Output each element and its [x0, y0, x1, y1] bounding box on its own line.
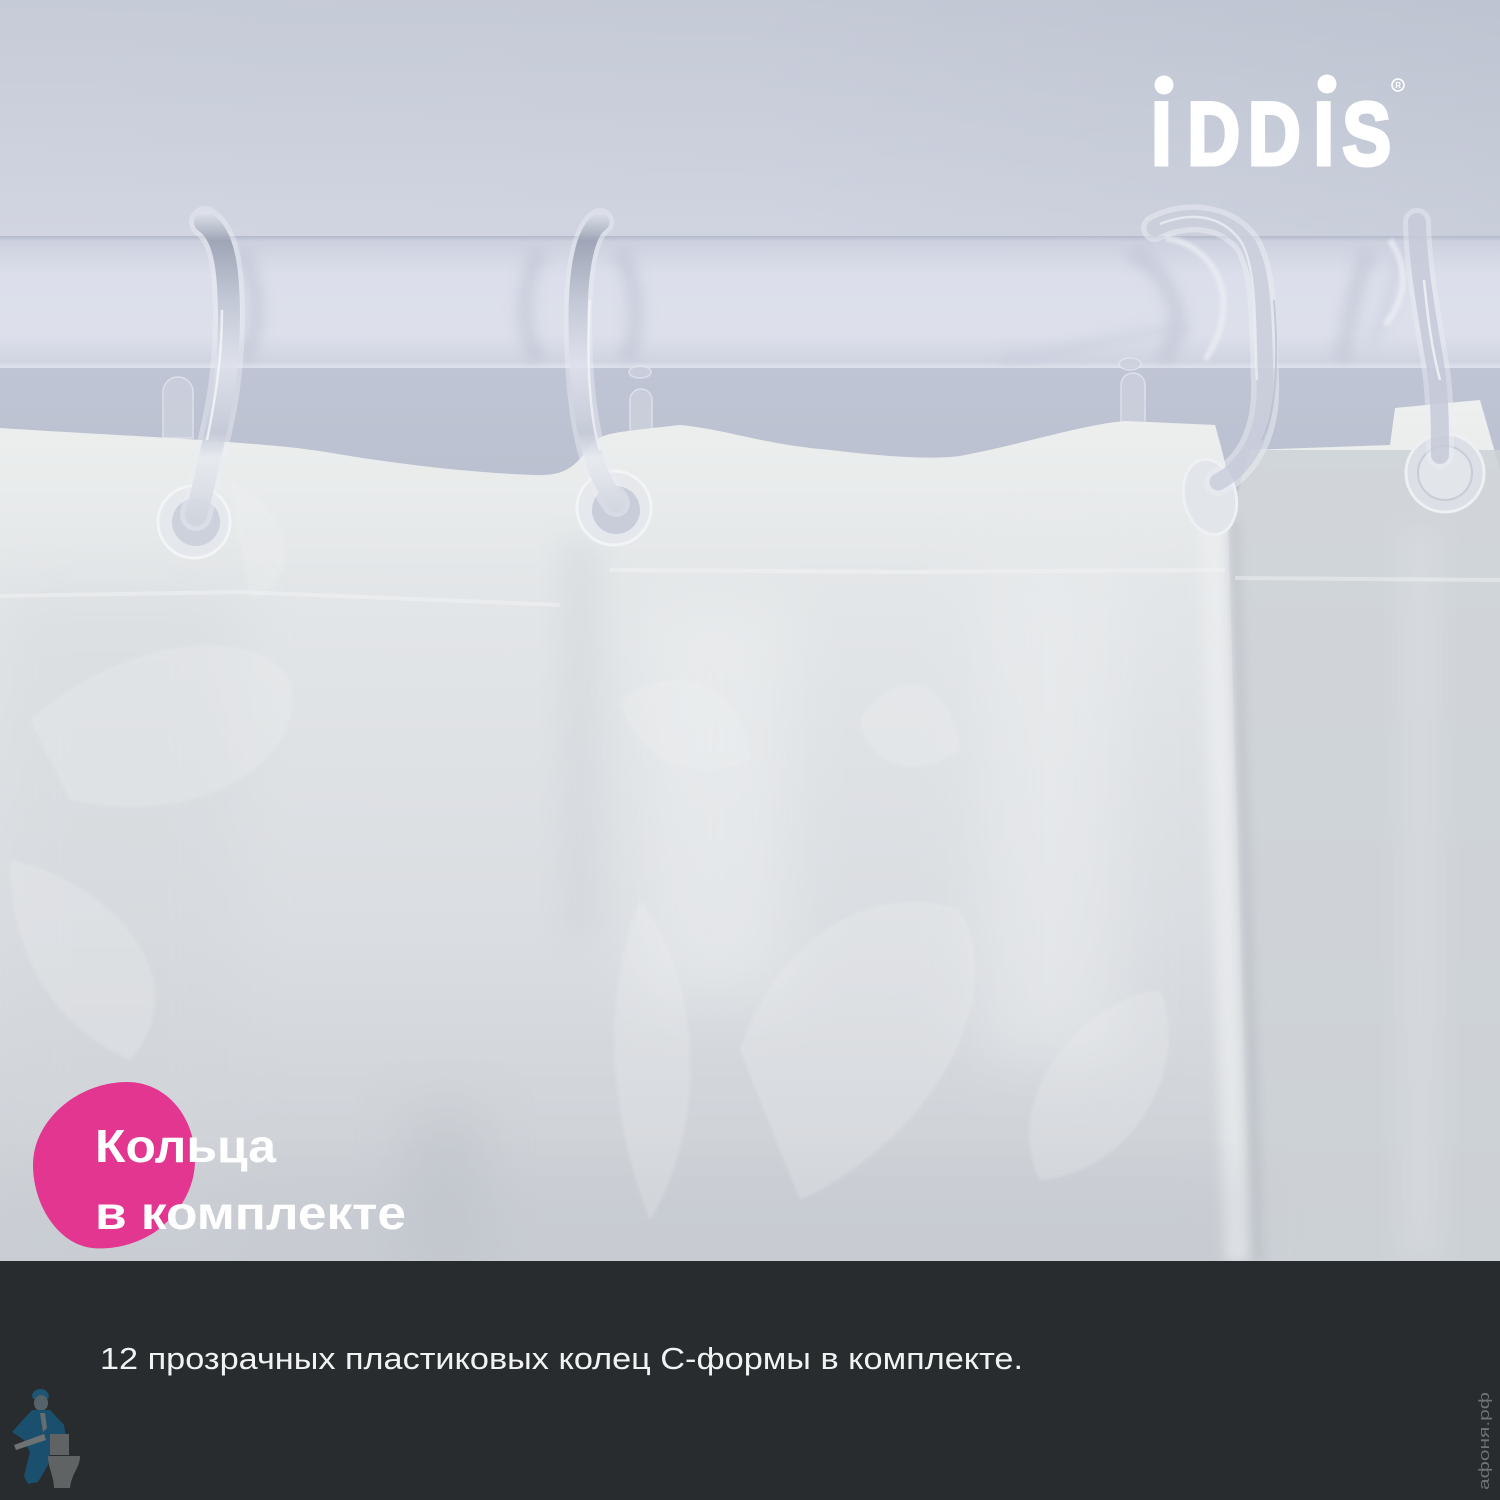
heading: Кольца — [95, 1120, 276, 1172]
curtain fabric — [0, 400, 1500, 1270]
vertical watermark: афоня.рф — [1476, 1392, 1493, 1490]
curtain rod — [0, 236, 1500, 368]
background wall — [0, 0, 1500, 240]
woven petal pattern — [10, 480, 1169, 1220]
hem stitching — [0, 570, 1500, 605]
cast shadows and fold shading — [0, 450, 1500, 1270]
plastic ring pegs — [163, 358, 1145, 438]
brand logo — [1151, 74, 1404, 184]
description text: 12 прозрачных пластиковых колец С-формы в комплекте. — [100, 1341, 1023, 1376]
heading: в комплекте — [95, 1187, 406, 1239]
pink accent blob — [33, 1082, 195, 1248]
band of wall below rod — [0, 366, 1500, 516]
ring 1 with grommet — [158, 222, 230, 558]
heading — [95, 1120, 406, 1239]
logo wordmark: IDDIS — [1151, 85, 1391, 184]
icon: plumber with toilet — [12, 1389, 80, 1488]
ring 4 with grommet — [1406, 222, 1484, 512]
ring 3 with grommet — [1155, 217, 1276, 540]
brand logo: R — [1395, 81, 1401, 90]
ring 2 with grommet — [577, 222, 651, 545]
dark footer panel — [0, 1261, 1500, 1500]
